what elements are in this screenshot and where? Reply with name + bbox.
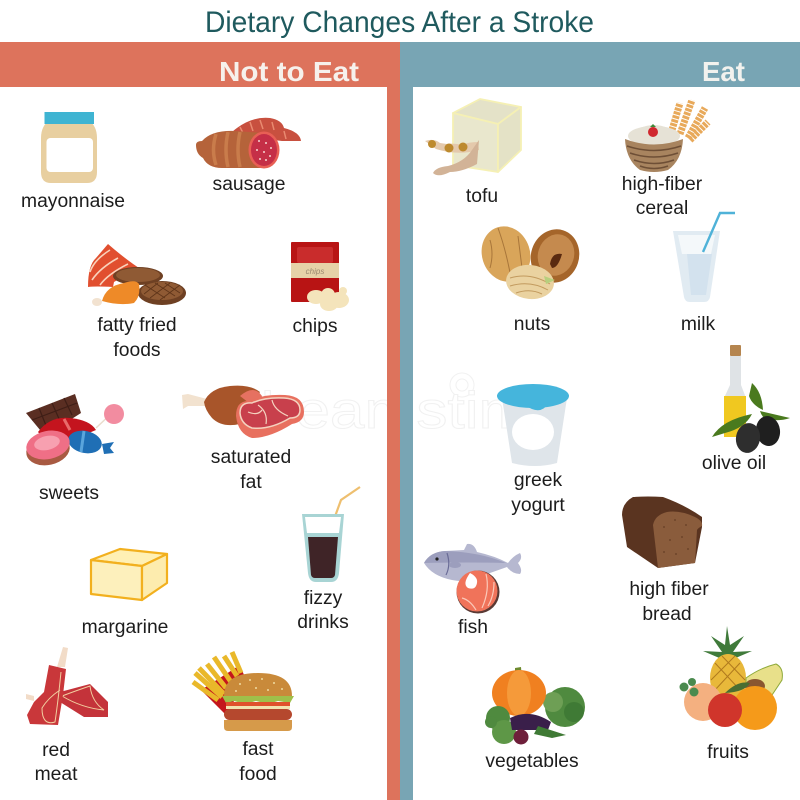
item: margarine — [82, 549, 168, 638]
label: sweets — [39, 483, 99, 504]
icon: fish and salmon steak — [424, 544, 521, 614]
icon: meat chops — [26, 647, 108, 725]
label: fish — [458, 617, 488, 638]
label: chips — [292, 316, 338, 337]
label: greek — [514, 470, 562, 491]
label: olive oil — [702, 453, 766, 474]
label: red — [42, 740, 70, 761]
item: greek yogurt — [497, 384, 569, 516]
icon: yogurt cup — [497, 384, 569, 466]
panel: eat — [400, 42, 800, 800]
icon: cereal bowl with wheat — [625, 100, 708, 172]
label: mayonnaise — [21, 191, 125, 212]
label: tofu — [466, 186, 498, 207]
item: vegetables — [485, 667, 585, 772]
label: drinks — [297, 612, 349, 633]
icon: oil bottle and olives — [712, 345, 790, 455]
icon: bag of chips: chips — [306, 267, 324, 276]
icon: fries and burger — [193, 652, 294, 731]
label: milk — [681, 314, 715, 335]
label: nuts — [514, 314, 550, 335]
label: high fiber — [629, 579, 709, 600]
item: sweets — [23, 394, 124, 504]
label: cereal — [636, 198, 688, 219]
label: vegetables — [485, 751, 579, 772]
icon: sausage — [196, 118, 301, 168]
icon: chicken leg and steak — [182, 386, 304, 438]
item: fizzy drinks — [297, 487, 360, 633]
icon: chocolate and candy — [23, 394, 124, 469]
item: high fiber bread — [622, 496, 709, 625]
item: fatty fried foods — [88, 244, 186, 361]
panel frame: eat — [400, 42, 800, 800]
item: milk — [673, 213, 735, 335]
icon: margarine block — [91, 549, 167, 600]
icon: cola glass with straw — [302, 487, 360, 582]
item: saturated fat — [182, 386, 304, 493]
icon: glass of milk with straw — [673, 213, 735, 302]
label: yogurt — [511, 495, 565, 516]
icon: brown bread loaf — [622, 496, 702, 568]
item: red meat — [26, 647, 108, 785]
item: fruits — [680, 626, 782, 763]
icon: pineapple, avocado and citrus — [680, 626, 782, 730]
label: saturated — [211, 447, 291, 468]
item: high-fiber cereal — [622, 100, 708, 219]
item: olive oil — [702, 345, 790, 474]
label: fast — [242, 739, 274, 760]
icon: pumpkin and vegetables — [485, 667, 585, 744]
item: nuts — [475, 220, 586, 335]
label: fatty fried — [97, 315, 177, 336]
panel: not to eat — [0, 42, 400, 800]
icon: bacon, patties and nugget — [88, 244, 186, 306]
title: Dietary Changes After a Stroke — [205, 6, 594, 39]
label: fizzy — [304, 588, 343, 609]
item: chips — [291, 242, 349, 337]
panel frame: not to eat — [0, 42, 400, 800]
icon: mayonnaise jar — [41, 112, 97, 183]
label: sausage — [213, 174, 285, 195]
label: bread — [642, 604, 692, 625]
watermark: dreamstime — [240, 382, 565, 440]
icon: tofu and soybeans — [425, 99, 521, 175]
item: tofu — [425, 99, 521, 207]
label: margarine — [82, 617, 168, 638]
heading: not to eat: Not to Eat — [219, 56, 359, 87]
heading: eat: Eat — [702, 56, 745, 87]
item: fast food — [193, 652, 294, 785]
item: fish — [424, 544, 521, 638]
label: fat — [240, 472, 262, 493]
item: sausage — [196, 118, 301, 195]
label: food — [239, 764, 277, 785]
label: foods — [113, 340, 161, 361]
icon: walnuts and almond — [475, 220, 586, 301]
item: mayonnaise — [21, 112, 125, 212]
label: meat — [35, 764, 78, 785]
label: fruits — [707, 742, 749, 763]
label: high-fiber — [622, 174, 703, 195]
